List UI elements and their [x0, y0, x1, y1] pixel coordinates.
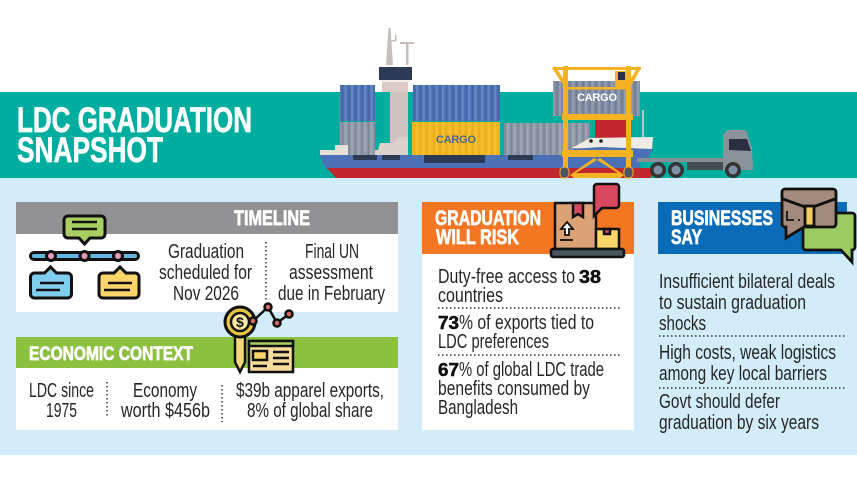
text: LDC since 1975 [29, 380, 94, 422]
yellow cargo container: CARGO [436, 134, 476, 146]
illustration: cargo ship, crane and truck [320, 28, 753, 178]
risk item: global LDC trade benefits: 67 [438, 360, 459, 380]
icon: briefcase and speech bubbles [782, 189, 855, 262]
says item: bilateral deals [659, 271, 835, 335]
gray containers [504, 123, 590, 155]
timeline text: graduation date [159, 241, 252, 305]
text: economy worth [120, 380, 210, 422]
timeline heading [16, 202, 398, 234]
graduation will risk heading: GRADUATION [435, 207, 541, 230]
yellow cargo container [412, 122, 500, 155]
risk item: global LDC trade benefits: Bangladesh [438, 397, 518, 419]
title: SNAPSHOT [17, 131, 163, 170]
left container stack [340, 85, 375, 155]
says item: bilateral deals: to sustain graduation [659, 292, 806, 314]
icon: parcels on laptop with speech bubble [551, 184, 624, 257]
risk item: duty-free access: 38 [579, 267, 601, 287]
timeline text: graduation date: Nov 2026 [173, 283, 239, 305]
risk item: exports tied to LDC preferences: LDC preferences [438, 331, 549, 353]
text: LDC since 1975: 1975 [46, 400, 77, 422]
red container [595, 120, 627, 138]
timeline text: graduation date: Graduation [168, 241, 244, 263]
text: apparel exports: 8% of global share [247, 400, 373, 422]
title [17, 101, 252, 170]
risk item: duty-free access: Duty-free access to [438, 266, 575, 288]
timeline text: UN assessment: due in February [278, 283, 385, 305]
truck [637, 130, 753, 178]
icon: coin magnifier, chart and newspaper [225, 304, 293, 372]
risk item: global LDC trade benefits: benefits consumed by [438, 378, 590, 400]
businesses say heading: SAY [671, 226, 702, 249]
crane wheels [560, 167, 633, 178]
timeline text: UN assessment: Final UN [305, 241, 359, 263]
ship deck ends [320, 145, 348, 155]
graduation will risk heading: WILL RISK [436, 226, 519, 249]
businesses say heading [658, 202, 847, 254]
ship masts [386, 28, 414, 65]
timeline heading: TIMELINE [234, 207, 310, 230]
says item: defer graduation [659, 391, 819, 434]
icon: coin magnifier, chart and newspaper: $ [236, 314, 244, 330]
says item: bilateral deals: shocks [659, 313, 706, 335]
hanging gray cargo container: CARGO [577, 92, 617, 104]
risk item: duty-free access [438, 266, 601, 307]
risk item: exports tied to LDC preferences: % of exports tied to [459, 312, 594, 334]
panel: businesses say [658, 189, 855, 434]
yellow crane [552, 66, 641, 178]
risk item: exports tied to LDC preferences: 73 [438, 313, 459, 333]
economic context heading: ECONOMIC CONTEXT [29, 344, 193, 365]
ship hull [320, 155, 660, 178]
panel: graduation will risk [422, 184, 634, 430]
risk item: global LDC trade benefits [438, 359, 604, 419]
text: apparel exports: $39b apparel exports, [236, 380, 384, 402]
text: economy worth: Economy [133, 380, 197, 402]
timeline text: UN assessment: assessment [289, 262, 373, 284]
blue container [413, 85, 500, 121]
economic context heading [16, 337, 398, 368]
graduation will risk heading [422, 202, 634, 254]
risk item: global LDC trade benefits: % of global LDC trade [459, 359, 604, 381]
hanging gray cargo container [553, 81, 640, 116]
text: LDC since 1975: LDC since [29, 380, 94, 402]
panel: timeline [16, 202, 398, 312]
businesses say heading: BUSINESSES [671, 207, 773, 230]
white boat [572, 110, 653, 158]
ship bridge tower [364, 67, 412, 155]
icon: timeline with speech bubbles [30, 216, 139, 298]
says item: costs and logistics [659, 342, 836, 385]
text: economy worth: worth $456b [120, 400, 210, 422]
risk item: exports tied to LDC preferences [438, 312, 594, 353]
panel: economic context [16, 304, 398, 430]
risk item: duty-free access: countries [438, 285, 503, 307]
teal title band [0, 92, 857, 178]
says item: defer graduation: Govt should defer [659, 391, 780, 413]
light blue content background [0, 178, 857, 455]
title: LDC GRADUATION [17, 101, 252, 140]
text: apparel exports [236, 380, 384, 422]
timeline text: UN assessment [278, 241, 385, 305]
timeline text: graduation date: scheduled for [159, 262, 252, 284]
